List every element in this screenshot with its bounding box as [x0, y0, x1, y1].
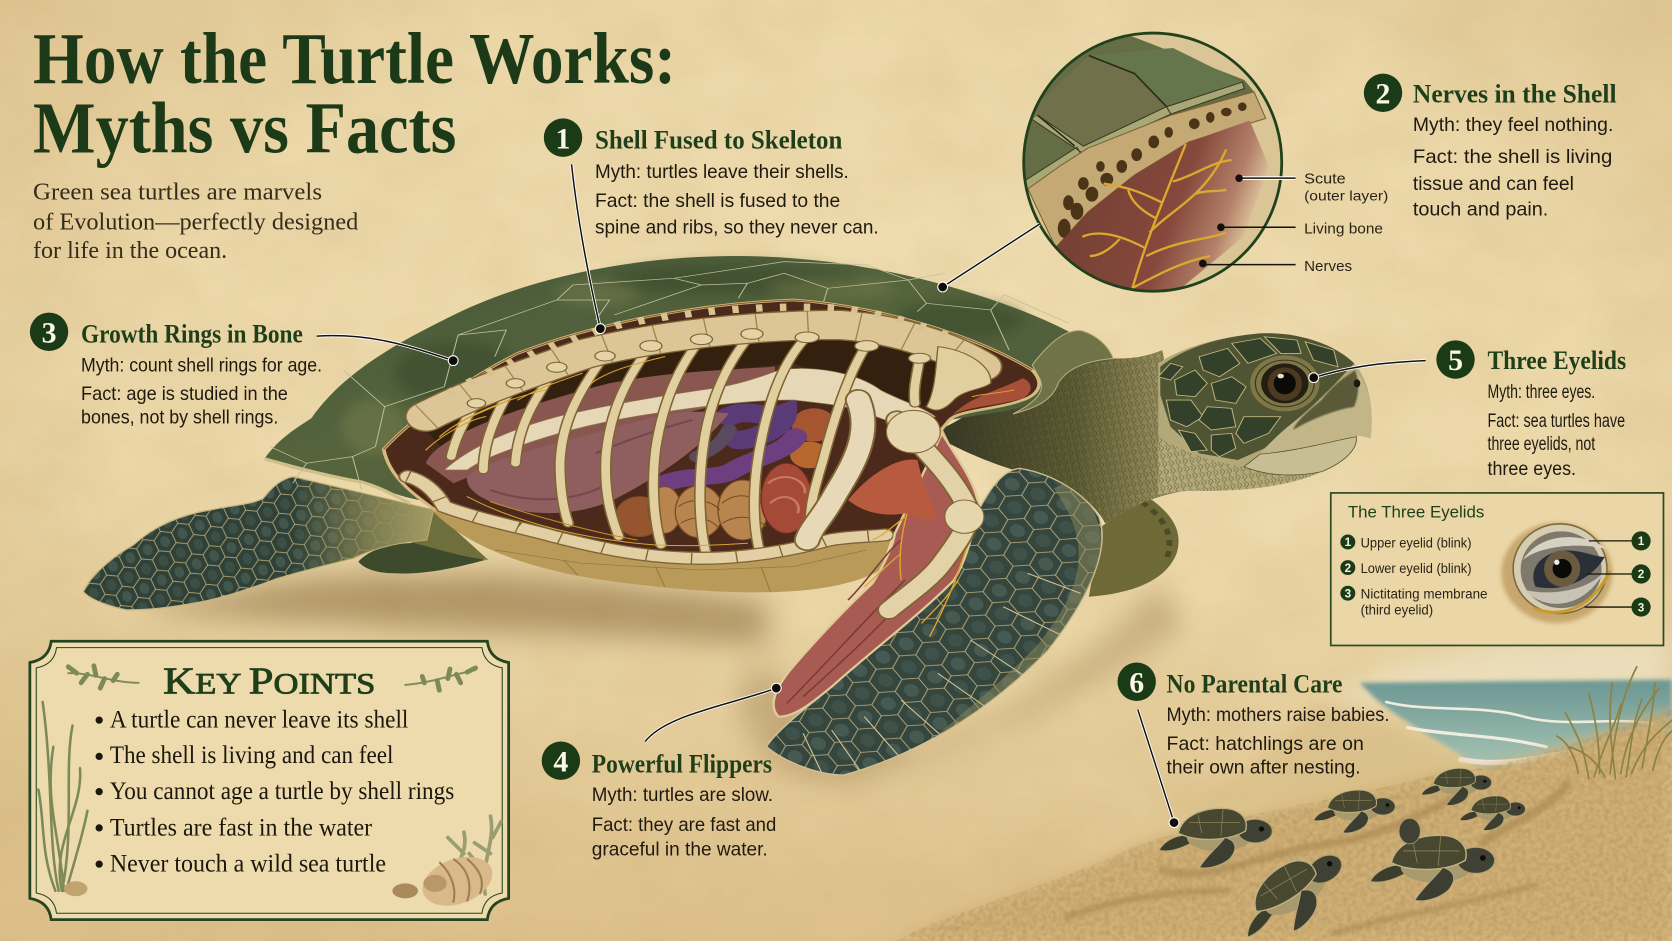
dune sand [896, 709, 1672, 941]
living bone label [1217, 221, 1383, 238]
beach scene with sea, sand and grass [896, 629, 1672, 941]
sand tracks [1066, 784, 1568, 934]
callout 1: shell fused to skeleton: Fact: the shell is fused to the [595, 191, 840, 212]
front body muscle [949, 378, 1031, 418]
callout 4: powerful flippers: 4 [553, 745, 568, 778]
callout 3: growth rings in bone: bones, not by shell rings. [81, 408, 278, 429]
inset labels [1199, 171, 1388, 275]
nerve cords [426, 357, 1014, 546]
shell cross-section inset [1013, 32, 1282, 297]
left laurel [68, 666, 139, 688]
callout 4: powerful flippers: graceful in the water. [592, 840, 768, 861]
callout 6: no parental care: 6 [1129, 666, 1144, 699]
upper muscle [848, 460, 936, 520]
orange organs [790, 408, 836, 468]
eyelid pointers: 3 [1638, 601, 1645, 614]
neck [930, 350, 1191, 523]
leader line: inset to shell [938, 224, 1040, 292]
eyelid list: 3 [1345, 587, 1352, 600]
coral decoration [448, 816, 501, 894]
scute label [1235, 171, 1388, 204]
purple intestines [665, 413, 796, 483]
callout 1: shell fused to skeleton [544, 118, 879, 239]
hatchling 2 [1314, 790, 1395, 833]
plastron underside [426, 503, 894, 592]
panel: the three eyelids [1331, 493, 1663, 645]
bullet list [96, 705, 454, 878]
panel heading: The Three Eyelids [1348, 502, 1484, 521]
body cavity cutaway [384, 300, 1039, 558]
limb bones [889, 420, 969, 610]
panel: key points [30, 641, 509, 920]
callout 2: nerves in the shell: tissue and can feel [1413, 174, 1574, 195]
hatchling 3 [1421, 768, 1491, 805]
scute label: Scute [1304, 171, 1346, 188]
callout 4: powerful flippers [542, 741, 776, 861]
callout 1: shell fused to skeleton: 1 [556, 122, 570, 155]
eye [1250, 355, 1319, 411]
intro text: of Evolution—perfectly designed [33, 208, 358, 235]
callout 3: growth rings in bone: Myth: count shell rings for age. [81, 355, 322, 376]
eyelid list: Upper eyelid (blink) [1361, 534, 1472, 550]
nerves [864, 483, 970, 637]
bullet list: Turtles are fast in the water [110, 812, 373, 841]
callout 6: no parental care: No Parental Care [1167, 668, 1343, 698]
sea turtle anatomy illustration [83, 256, 1372, 777]
seaweed decoration [38, 702, 87, 891]
small shell decoration [64, 881, 87, 896]
eye close-up [1501, 523, 1612, 623]
callout 5: three eyelids: 5 [1448, 344, 1463, 377]
front flipper [766, 400, 1102, 777]
wet sand [1173, 704, 1488, 811]
title: Myths vs Facts [33, 88, 456, 169]
head scutes [1158, 333, 1354, 460]
callout 2: nerves in the shell: Nerves in the Shell [1413, 78, 1617, 108]
eyelid pointers: 1 [1638, 535, 1645, 548]
front marginal scute [1013, 331, 1113, 414]
head base [1158, 333, 1372, 495]
tan coiled intestines [616, 480, 768, 540]
eyelid list: (third eyelid) [1361, 602, 1433, 618]
living bone layer [1028, 92, 1266, 248]
scute lines [270, 262, 1069, 490]
bullet list: Never touch a wild sea turtle [110, 849, 386, 878]
spine and rib bones [408, 307, 991, 558]
callout 4: powerful flippers: Powerful Flippers [592, 748, 772, 778]
callout 6: no parental care: Fact: hatchlings are on [1167, 734, 1364, 755]
heading: KEY POINTS [163, 660, 375, 702]
muscle tissue [1056, 121, 1269, 297]
callout 3: growth rings in bone: Growth Rings in Bone [81, 318, 303, 348]
eyelid list: Lower eyelid (blink) [1361, 560, 1472, 576]
dune grass [1557, 667, 1672, 779]
rear flippers [83, 477, 488, 610]
callout 1: shell fused to skeleton: spine and ribs, so they never can. [595, 218, 879, 239]
leader line 1 [572, 164, 605, 334]
surf foam [1386, 702, 1653, 762]
outer scutes [1025, 36, 1254, 192]
hatchling 6 [1370, 835, 1495, 901]
hatchling 5 [1226, 839, 1360, 941]
nerves label [1199, 258, 1352, 275]
callout 5: three eyelids: Three Eyelids [1488, 345, 1626, 375]
cut flipper muscle [774, 433, 979, 717]
eyelid list: Nictitating membrane [1361, 586, 1488, 602]
callout 2: nerves in the shell: touch and pain. [1413, 200, 1548, 221]
callout 2: nerves in the shell: 2 [1376, 77, 1390, 110]
callout 3: growth rings in bone: 3 [42, 316, 57, 349]
turtle ground shadow [139, 574, 1184, 781]
eyelid list [1340, 534, 1488, 618]
callout 6: no parental care: Myth: mothers raise babies. [1167, 705, 1389, 726]
neck and head [930, 333, 1372, 523]
leader line 5 [1309, 361, 1426, 383]
callout 5: three eyelids: Myth: three eyes. [1488, 382, 1595, 403]
callout 4: powerful flippers: Fact: they are fast and [592, 815, 776, 836]
intro text: Green sea turtles are marvels [33, 179, 322, 206]
callout 2: nerves in the shell [1364, 74, 1617, 221]
callout 2: nerves in the shell: Myth: they feel nothing. [1413, 115, 1613, 136]
callout 6: no parental care [1118, 663, 1389, 778]
hatchling 4 [1460, 796, 1525, 830]
sea [1360, 680, 1672, 770]
hatchling turtles [1159, 768, 1525, 941]
flipper scales [766, 468, 1102, 775]
intro text [33, 179, 358, 264]
large shell decoration [392, 848, 499, 915]
bullet list: The shell is living and can feel [110, 740, 393, 769]
callout 3: growth rings in bone [30, 313, 322, 429]
intro text: for life in the ocean. [33, 237, 227, 264]
nerve branches [1082, 144, 1232, 288]
callout 3: growth rings in bone: Fact: age is studied in the [81, 384, 288, 405]
callout 1: shell fused to skeleton: Myth: turtles leave their shells. [595, 162, 849, 183]
title [33, 18, 676, 169]
title: How the Turtle Works: [33, 18, 676, 99]
leader line 4 [645, 683, 781, 741]
plastron bones [408, 477, 885, 558]
eyelid list: 1 [1345, 536, 1352, 549]
living bone label: Living bone [1304, 221, 1383, 238]
lower jaw [1244, 437, 1356, 475]
hatchling 1 [1159, 808, 1272, 868]
callout 5: three eyelids: Fact: sea turtles have [1488, 411, 1625, 432]
scute label: (outer layer) [1304, 188, 1388, 204]
right laurel [405, 668, 476, 690]
bullet list: A turtle can never leave its shell [110, 705, 408, 734]
callout 2: nerves in the shell: Fact: the shell is living [1413, 147, 1612, 168]
callout 6: no parental care: their own after nesting. [1167, 757, 1361, 778]
eyelid pointers [1585, 531, 1651, 617]
beak [1260, 370, 1372, 454]
carapace shell [264, 256, 1113, 504]
lungs [426, 367, 775, 513]
bullet list: You cannot age a turtle by shell rings [110, 776, 454, 805]
callout 5: three eyelids: three eyes. [1488, 459, 1576, 480]
red coiled intestine [761, 463, 812, 533]
eyelid list: 2 [1345, 562, 1352, 575]
leader line 3 [317, 336, 458, 366]
callout 1: shell fused to skeleton: Shell Fused to Skeleton [595, 124, 843, 154]
far front flipper [1089, 500, 1179, 597]
callout 5: three eyelids [1436, 340, 1626, 480]
nerves label: Nerves [1304, 258, 1352, 275]
dark upper chamber [426, 326, 977, 457]
eyelid pointers: 2 [1638, 568, 1645, 581]
callout 4: powerful flippers: Myth: turtles are slow. [592, 785, 773, 806]
leader line 6 [1138, 709, 1179, 827]
callout 5: three eyelids: three eyelids, not [1488, 434, 1596, 455]
far flipper of hatchling 6 [1399, 818, 1420, 844]
